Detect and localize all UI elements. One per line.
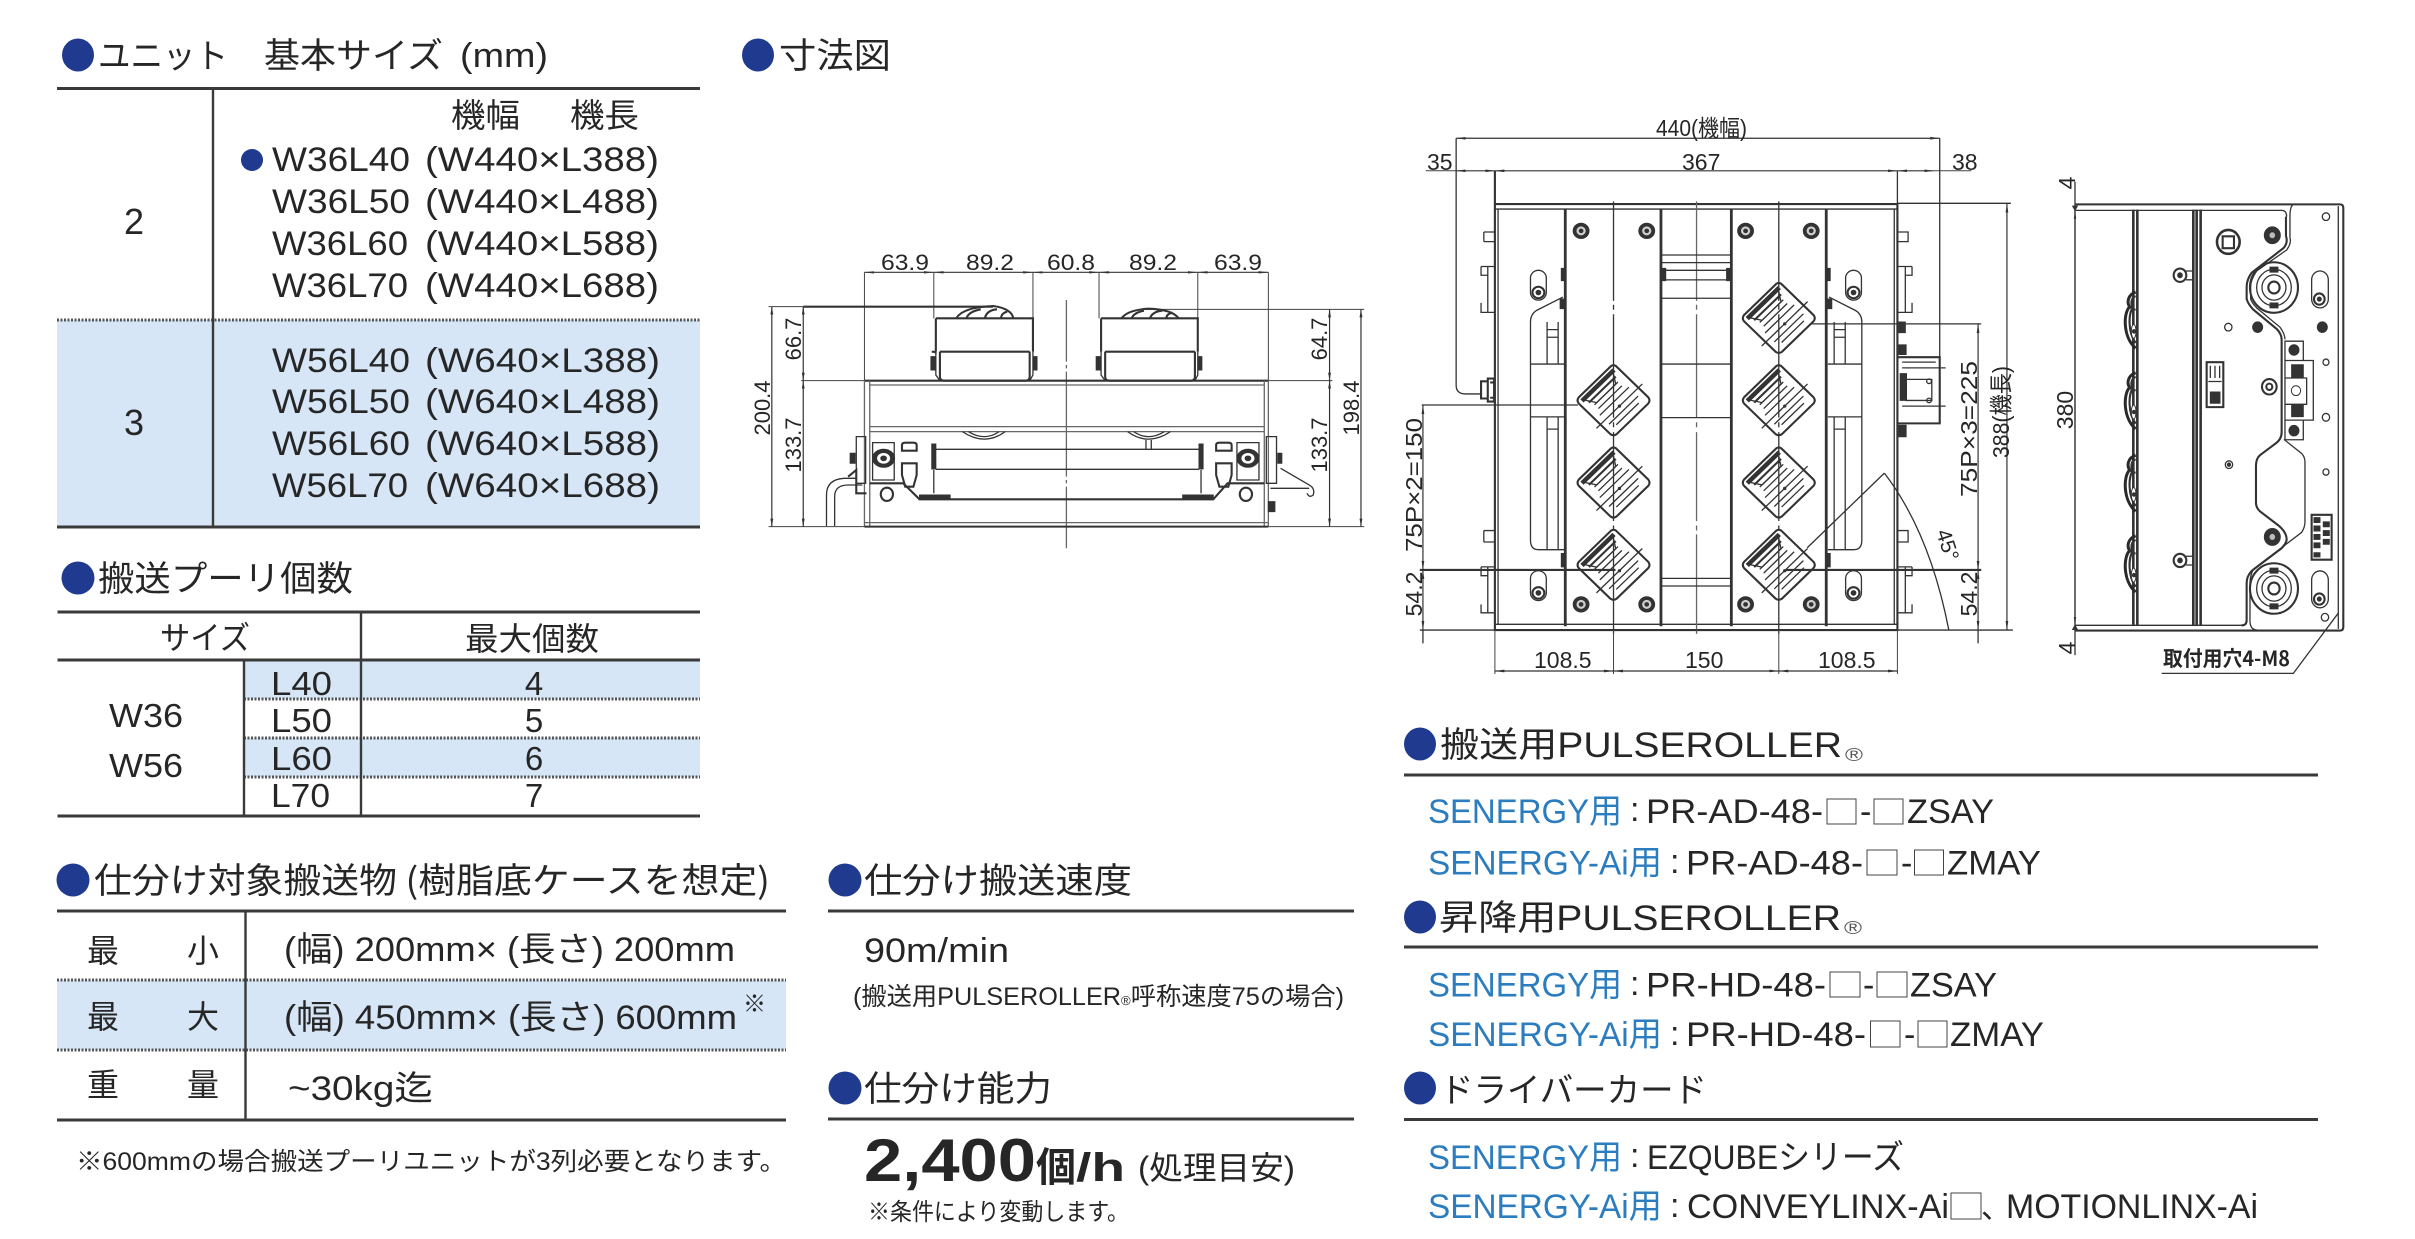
top view dimensions: 108.5 [1818, 647, 1876, 673]
front view dimensions [750, 250, 1364, 473]
heading: lifting PULSEROLLER: 昇降用PULSEROLLER [1439, 899, 1841, 938]
row labels: 量 [187, 1060, 219, 1106]
SENERGY-Ai model: PR-AD-48- [1686, 844, 1863, 882]
SENERGY driver: SENERGY用 [1428, 1139, 1622, 1177]
width labels: W36 [109, 697, 183, 734]
row labels: 小 [187, 926, 219, 972]
SENERGY driver [1428, 1137, 1904, 1177]
width labels: W56 [109, 747, 183, 784]
front view dimensions: 63.9 [881, 250, 929, 275]
rule [828, 1118, 1354, 1120]
column labels: 機長 [570, 89, 639, 137]
capacity note: ※条件により変動します。 [868, 1199, 1129, 1226]
SENERGY model [1428, 965, 1997, 1004]
SENERGY model: - [1860, 793, 1871, 831]
front view dimensions: 200.4 [750, 380, 775, 436]
capacity value: (処理目安) [1138, 1150, 1295, 1186]
side view dimensions: 380 [2052, 391, 2078, 429]
row count 2: 2 [124, 201, 144, 242]
SENERGY-Ai model: - [1904, 1016, 1915, 1054]
max counts: 6 [525, 740, 543, 777]
top view dimensions: 75P×2=150 [1401, 418, 1427, 552]
SENERGY-Ai model [1428, 1015, 2044, 1054]
top view dimensions: 388(機長) [1988, 366, 2014, 458]
panel: lifting PULSEROLLER [1404, 899, 2318, 1054]
SENERGY-Ai model: ZMAY [1947, 844, 2041, 882]
row labels [87, 926, 219, 1106]
side view dimensions [2052, 176, 2290, 673]
SENERGY model: : [1630, 965, 1639, 1003]
SENERGY-Ai driver: : [1670, 1187, 1679, 1225]
panel: pulley count [58, 551, 700, 816]
SENERGY model: : [1630, 791, 1639, 829]
SENERGY-Ai model: ZMAY [1950, 1016, 2044, 1054]
drawing: side view [2052, 176, 2343, 673]
panel: unit basic size [57, 28, 700, 527]
panel: driver card [1404, 1063, 2318, 1227]
front view dimensions: 66.7 [781, 318, 806, 360]
SENERGY model: PR-HD-48- [1646, 966, 1826, 1004]
SENERGY-Ai driver: SENERGY-Ai用 [1428, 1188, 1662, 1226]
heading: unit basic size: 基本サイズ [264, 28, 443, 79]
max counts [525, 665, 543, 814]
W36 size list: W36L40 [272, 141, 410, 179]
heading: conveying pulley count: 搬送プーリ個数 [98, 551, 353, 602]
front view dimensions: 133.7 [1307, 417, 1332, 473]
length labels [271, 665, 332, 814]
side view dimensions: 取付用穴4-M8 [2163, 643, 2290, 673]
SENERGY model: ZSAY [1907, 793, 1994, 831]
row labels: 最 [87, 926, 119, 972]
table rules [57, 911, 786, 1120]
W56 size list: W56L60 [272, 425, 410, 463]
heading: conveying PULSEROLLER: ® [1845, 745, 1863, 765]
speed note: (搬送用PULSEROLLER®呼称速度75の場合) [853, 983, 1344, 1011]
front view dimensions: 60.8 [1047, 250, 1095, 275]
shaded row [57, 980, 786, 1050]
row count 3: 3 [124, 402, 144, 443]
table rules [57, 88, 700, 527]
column labels [451, 89, 639, 137]
front view dimensions: 133.7 [781, 417, 806, 473]
max counts: 5 [525, 702, 543, 739]
width labels [109, 697, 183, 784]
heading: unit basic size: (mm) [460, 37, 548, 75]
W56 size list: (W640×L488) [425, 383, 660, 421]
W36 size list [272, 141, 659, 305]
heading: unit basic size [62, 28, 548, 79]
SENERGY model: - [1863, 966, 1874, 1004]
top view dimensions: 45° [1931, 526, 1963, 564]
length labels: L70 [271, 777, 330, 814]
front view linework [769, 272, 1364, 548]
side view linework [2073, 182, 2343, 673]
row labels: 最 [87, 992, 119, 1038]
rule [1404, 1118, 2318, 1121]
W36 size list: W36L70 [272, 267, 408, 305]
front view dimensions: 198.4 [1339, 380, 1364, 436]
heading: sorting speed: 仕分け搬送速度 [864, 853, 1132, 904]
row values: ※ [743, 991, 766, 1018]
row values [284, 931, 766, 1108]
row labels: 大 [187, 992, 219, 1038]
panel: sorting capacity [828, 1061, 1354, 1226]
heading: conveying PULSEROLLER: 搬送用PULSEROLLER [1440, 726, 1842, 765]
SENERGY model: ZSAY [1910, 966, 1997, 1004]
W36 size list: W36L50 [272, 183, 410, 221]
heading: driver card: ドライバーカード [1440, 1063, 1707, 1112]
top view dimensions [1401, 115, 2014, 673]
side view dimensions: 4 [2054, 176, 2080, 189]
front view dimensions: 89.2 [966, 250, 1014, 275]
SENERGY-Ai driver [1428, 1183, 2258, 1227]
W56 size list: W56L70 [272, 467, 408, 505]
panel: target conveyed goods [56, 853, 786, 1176]
front view dimensions: 63.9 [1214, 250, 1262, 275]
SENERGY-Ai model: SENERGY-Ai用 [1428, 1016, 1662, 1054]
drawing: top view [1401, 115, 2014, 674]
capacity value: 個 [1036, 1135, 1076, 1193]
table header: 最大個数 [465, 614, 599, 660]
max counts: 4 [525, 665, 543, 702]
rule [828, 910, 1354, 912]
length labels: L50 [271, 702, 332, 739]
SENERGY-Ai driver: CONVEYLINX-Ai [1687, 1188, 1949, 1226]
top view dimensions: 150 [1685, 647, 1723, 673]
column labels: 機幅 [451, 89, 520, 137]
rule [1404, 774, 2318, 776]
length labels: L60 [271, 740, 332, 777]
W36 size list: (W440×L388) [425, 141, 659, 179]
SENERGY model: SENERGY用 [1428, 966, 1622, 1004]
top view dimensions: 54.2 [1956, 572, 1982, 616]
side view dimensions: 4 [2054, 641, 2080, 654]
SENERGY-Ai model: SENERGY-Ai用 [1428, 844, 1662, 882]
shaded rows [244, 660, 700, 777]
SENERGY model: SENERGY用 [1428, 793, 1622, 831]
top view dimensions: 440(機幅) [1656, 115, 1747, 141]
top view dimensions: 108.5 [1534, 647, 1592, 673]
length labels: L40 [271, 665, 332, 702]
row values: (幅) 450mm× (長さ) 600mm [284, 999, 737, 1037]
SENERGY-Ai model [1428, 843, 2041, 882]
top view dimensions: 367 [1682, 149, 1720, 175]
capacity value [864, 1127, 1295, 1194]
front view dimensions: 64.7 [1307, 318, 1332, 360]
W56 size list: W56L50 [272, 383, 410, 421]
W36 size list: (W440×L488) [425, 183, 659, 221]
W56 size list: (W640×L388) [425, 342, 660, 380]
heading: sorting capacity: 仕分け能力 [864, 1061, 1052, 1112]
row values: (幅) 200mm× (長さ) 200mm [284, 931, 735, 969]
top view dimensions: 54.2 [1401, 572, 1427, 616]
SENERGY driver: : [1630, 1137, 1639, 1175]
W36 size list: (W440×L588) [425, 225, 659, 263]
capacity value: 2,400 [864, 1127, 1036, 1194]
W36 size list: W36L60 [272, 225, 408, 263]
SENERGY model [1428, 791, 1994, 831]
SENERGY-Ai driver: 、 [1981, 1183, 2011, 1227]
panel: conveying PULSEROLLER [1404, 726, 2318, 882]
rule [1404, 946, 2318, 948]
SENERGY-Ai model: : [1670, 1015, 1679, 1053]
top view linework [1420, 138, 2013, 674]
top view dimensions: 75P×3=225 [1956, 361, 1982, 497]
heading: dimension drawings: 寸法図 [779, 28, 891, 79]
heading: unit basic size: ユニット [98, 29, 228, 78]
row values: ~30kg迄 [288, 1070, 433, 1108]
panel: sorting speed [828, 853, 1354, 1011]
SENERGY-Ai driver: MOTIONLINX-Ai [2006, 1188, 2258, 1226]
table header: サイズ [160, 613, 250, 659]
W56 size list: (W640×L588) [425, 425, 660, 463]
row labels: 重 [87, 1060, 119, 1106]
SENERGY model: PR-AD-48- [1646, 793, 1823, 831]
drawing: front view [750, 250, 1364, 548]
highlighted row background [57, 320, 700, 527]
W56 size list: (W640×L688) [425, 467, 660, 505]
SENERGY-Ai model: - [1901, 844, 1912, 882]
heading: lifting PULSEROLLER: ® [1844, 918, 1862, 938]
footnote: ※600mmの場合搬送プーリユニットが3列必要となります。 [76, 1148, 786, 1176]
top view dimensions: 38 [1952, 149, 1978, 175]
W56 size list: W56L40 [272, 342, 410, 380]
capacity value: /h [1076, 1146, 1125, 1190]
speed value: 90m/min [864, 932, 1009, 970]
W36 size list: (W440×L688) [425, 267, 659, 305]
SENERGY-Ai model: PR-HD-48- [1686, 1016, 1866, 1054]
table header [160, 613, 599, 660]
standard size marker [241, 149, 263, 171]
max counts: 7 [525, 777, 543, 814]
SENERGY driver: EZQUBEシリーズ [1647, 1139, 1904, 1177]
heading: target goods: 仕分け対象搬送物 (樹脂底ケースを想定) [94, 853, 770, 904]
front view dimensions: 89.2 [1129, 250, 1177, 275]
table rules [58, 612, 700, 816]
W56 size list [272, 342, 660, 505]
SENERGY-Ai model: : [1670, 843, 1679, 881]
top view dimensions: 35 [1427, 149, 1453, 175]
